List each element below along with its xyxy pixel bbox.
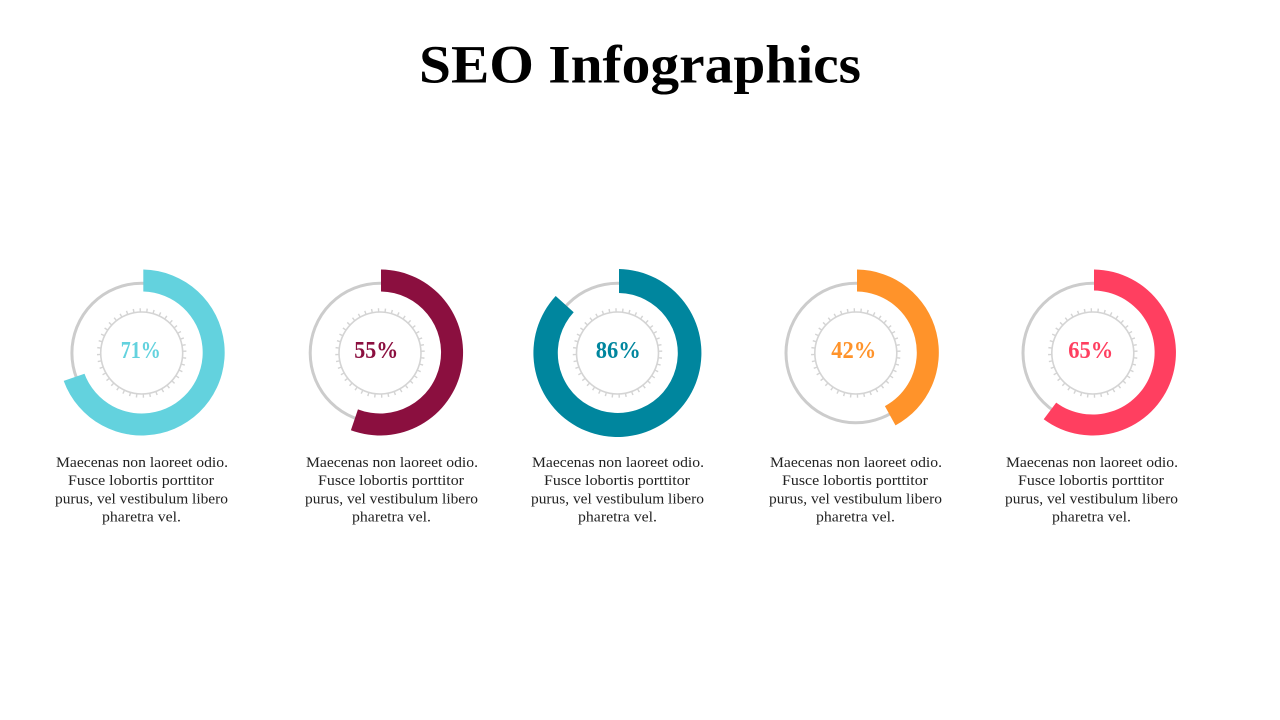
description: purus, vel vestibulum libero — [305, 492, 478, 508]
description: pharetra vel. — [816, 510, 895, 526]
progress arc — [533, 269, 701, 437]
description: Fusce lobortis porttitor — [318, 473, 464, 489]
inner tick dial — [810, 308, 901, 398]
panel: 65% gauge — [1005, 270, 1178, 526]
percentage: 42% — [831, 338, 876, 364]
description — [305, 455, 478, 526]
description: pharetra vel. — [352, 510, 431, 526]
track ring — [548, 283, 687, 423]
panel: 42% gauge — [769, 270, 942, 526]
panel: 55% gauge — [305, 270, 478, 526]
inner tick dial — [572, 308, 663, 398]
inner tick dial — [335, 308, 425, 398]
description: Fusce lobortis porttitor — [782, 473, 928, 489]
description — [769, 455, 942, 526]
description: purus, vel vestibulum libero — [769, 492, 942, 508]
description: purus, vel vestibulum libero — [531, 492, 704, 508]
percentage: 55% — [354, 338, 398, 364]
track ring — [72, 283, 212, 423]
description: pharetra vel. — [102, 510, 181, 526]
description — [531, 455, 704, 526]
inner tick dial — [1047, 308, 1138, 398]
percentage: 65% — [1068, 338, 1113, 364]
description: Fusce lobortis porttitor — [1018, 473, 1164, 489]
percentage: 86% — [596, 338, 641, 364]
title: SEO Infographics — [419, 34, 861, 94]
panel: 86% gauge — [531, 269, 704, 526]
inner tick dial — [96, 308, 187, 398]
track ring — [310, 283, 450, 423]
track ring — [786, 283, 926, 423]
description: Maecenas non laoreet odio. — [56, 455, 228, 471]
description: purus, vel vestibulum libero — [55, 492, 228, 508]
progress arc — [857, 270, 939, 425]
description: pharetra vel. — [1052, 510, 1131, 526]
description: Maecenas non laoreet odio. — [532, 455, 704, 471]
progress arc — [351, 270, 463, 435]
panel: 71% gauge — [55, 270, 228, 526]
description: Maecenas non laoreet odio. — [1006, 455, 1178, 471]
percentage: 71% — [121, 338, 161, 364]
description: purus, vel vestibulum libero — [1005, 492, 1178, 508]
description: Fusce lobortis porttitor — [68, 473, 214, 489]
progress arc — [1044, 270, 1176, 435]
description: Maecenas non laoreet odio. — [770, 455, 942, 471]
description: Maecenas non laoreet odio. — [306, 455, 478, 471]
progress arc — [64, 270, 225, 435]
description: Fusce lobortis porttitor — [544, 473, 690, 489]
description — [1005, 455, 1178, 526]
description: pharetra vel. — [578, 510, 657, 526]
description — [55, 455, 228, 526]
track ring — [1023, 283, 1163, 423]
